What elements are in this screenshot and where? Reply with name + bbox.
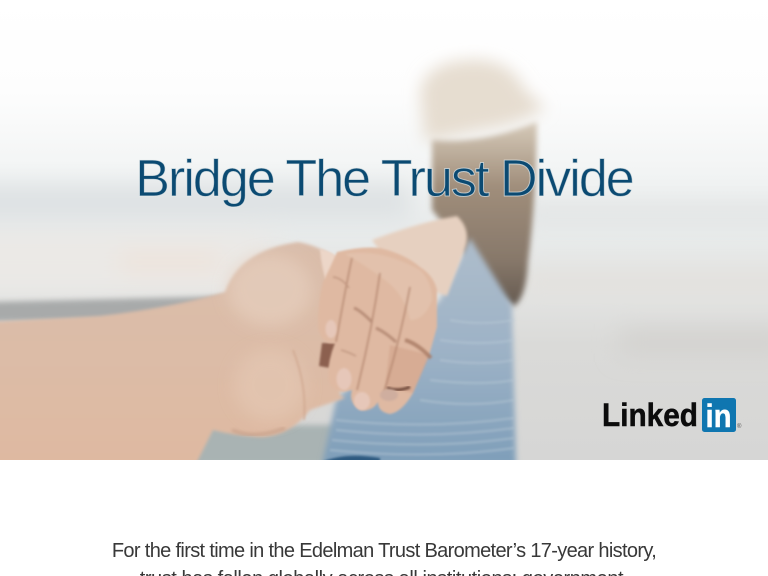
blurred backdrop bands	[0, 182, 407, 260]
shirt	[322, 238, 516, 465]
fingernails	[326, 320, 398, 410]
LinkedIn logo	[602, 398, 742, 434]
title: Bridge The Trust Divide	[135, 150, 633, 208]
near arm and hand	[0, 242, 345, 466]
woman's forearm	[372, 216, 467, 296]
in badge: in	[706, 398, 732, 434]
hat	[420, 60, 545, 142]
body text	[112, 540, 656, 576]
hero photo: two hands holding, woman in hat on blurred background	[0, 52, 768, 460]
shadowed gap under woman's fingers	[319, 343, 338, 368]
wordmark: Linked: Linked	[602, 398, 698, 433]
body text: For the first time in the Edelman Trust Barometer’s 17-year history,	[112, 540, 656, 562]
registered mark: ®	[737, 423, 742, 430]
hair	[432, 122, 537, 306]
woman's hand and fingers	[318, 248, 437, 414]
